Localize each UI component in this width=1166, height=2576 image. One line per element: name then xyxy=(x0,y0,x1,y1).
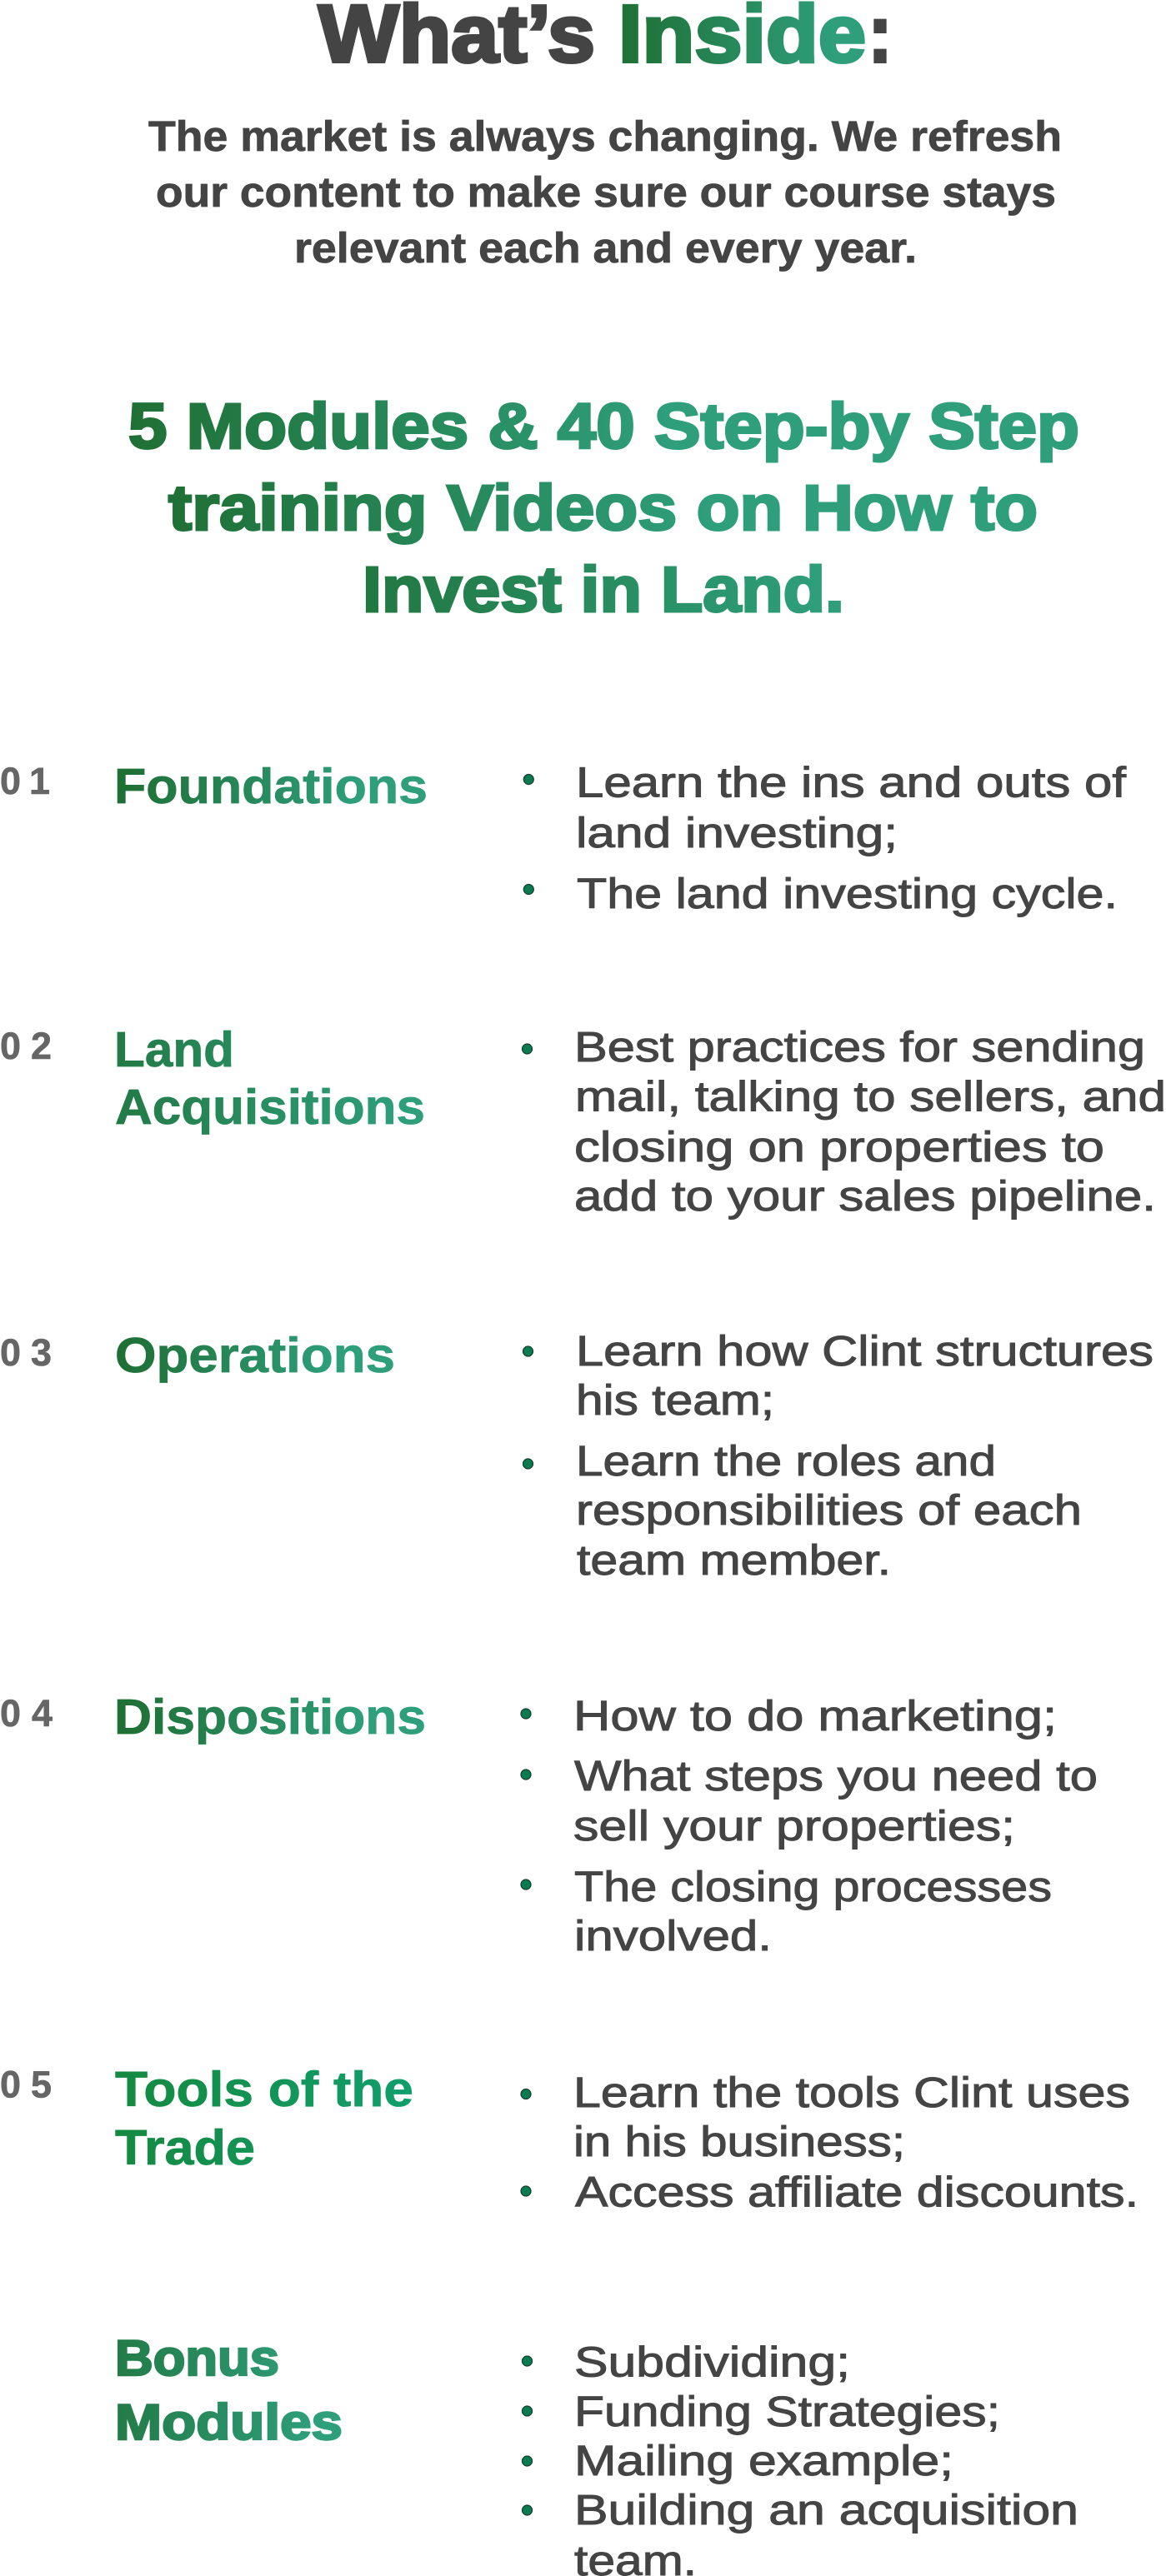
bullet list: closing on properties to xyxy=(574,1123,1104,1171)
heading: Tools of the Trade: Trade xyxy=(115,2120,255,2175)
heading: Land Acquisitions: Land xyxy=(114,1022,234,1077)
number 02: 02 xyxy=(0,1025,52,1067)
heading: Foundations: Foundations xyxy=(114,759,428,814)
bullet list: in his business; xyxy=(573,2118,905,2165)
bullet list: Learn the tools Clint uses xyxy=(573,2069,1130,2116)
bullet list xyxy=(521,1692,1098,1959)
heading: Tools of the Trade xyxy=(115,2062,413,2175)
subheading xyxy=(128,391,1079,626)
bullet list xyxy=(522,2338,1078,2576)
number 04: 04 xyxy=(0,1692,53,1735)
bullet list xyxy=(522,1023,1166,1220)
heading: Bonus Modules xyxy=(115,2330,343,2450)
bullet list: Learn the roles and xyxy=(576,1437,996,1485)
bullet list: involved. xyxy=(574,1912,772,1959)
bullet list: What steps you need to xyxy=(574,1752,1098,1800)
bullet list: The land investing cycle. xyxy=(577,870,1118,917)
bullet list: Learn how Clint structures xyxy=(576,1327,1153,1375)
bullet list: Mailing example; xyxy=(574,2437,953,2484)
bullet list: sell your properties; xyxy=(573,1802,1015,1850)
intro text: relevant each and every year. xyxy=(294,224,917,272)
subheading: Invest in Land. xyxy=(363,554,844,626)
intro text: our content to make sure our course stays xyxy=(156,168,1056,216)
bullet list: Building an acquisition xyxy=(574,2486,1078,2534)
bullet list: Best practices for sending xyxy=(574,1023,1145,1071)
panel: bonus modules xyxy=(115,2330,1078,2576)
heading: Land Acquisitions: Acquisitions xyxy=(115,1080,425,1135)
heading: Land Acquisitions xyxy=(114,1022,425,1135)
heading: Bonus Modules: Modules xyxy=(115,2394,343,2450)
bullet list: Learn the ins and outs of xyxy=(576,758,1127,806)
bullet list xyxy=(521,2069,1138,2216)
panel: module 05 xyxy=(0,2062,1138,2216)
bullet list xyxy=(523,1327,1153,1584)
bullet list: Funding Strategies; xyxy=(574,2388,1000,2435)
heading: Operations: Operations xyxy=(115,1328,395,1383)
title xyxy=(318,0,892,79)
intro text xyxy=(148,112,1062,272)
bullet list: land investing; xyxy=(576,809,898,856)
heading: Tools of the Trade: Tools of the xyxy=(115,2062,413,2117)
bullet list: team member. xyxy=(577,1536,891,1584)
bullet list: add to your sales pipeline. xyxy=(574,1172,1156,1220)
panel: module 01 xyxy=(0,758,1127,917)
bullet list: Subdividing; xyxy=(574,2338,850,2386)
bullet list: mail, talking to sellers, and xyxy=(575,1073,1166,1120)
panel: module 04 xyxy=(0,1690,1098,1959)
subheading: 5 Modules & 40 Step-by Step xyxy=(128,391,1079,462)
bullet list: his team; xyxy=(576,1376,774,1424)
bullet list: Access affiliate discounts. xyxy=(575,2168,1138,2216)
bullet list: The closing processes xyxy=(574,1863,1052,1910)
number 01: 01 xyxy=(0,760,50,802)
heading: Dispositions: Dispositions xyxy=(114,1690,426,1745)
bullet list xyxy=(523,758,1127,917)
panel: module 03 xyxy=(0,1327,1153,1584)
number 03: 03 xyxy=(0,1331,52,1374)
subheading: training Videos on How to xyxy=(168,472,1038,544)
bullet list: How to do marketing; xyxy=(573,1692,1057,1740)
intro text: The market is always changing. We refresh xyxy=(148,112,1062,160)
bullet list: responsibilities of each xyxy=(576,1486,1082,1534)
panel: module 02 xyxy=(0,1022,1166,1220)
heading: Bonus Modules: Bonus xyxy=(115,2330,279,2386)
number 05: 05 xyxy=(0,2063,52,2106)
